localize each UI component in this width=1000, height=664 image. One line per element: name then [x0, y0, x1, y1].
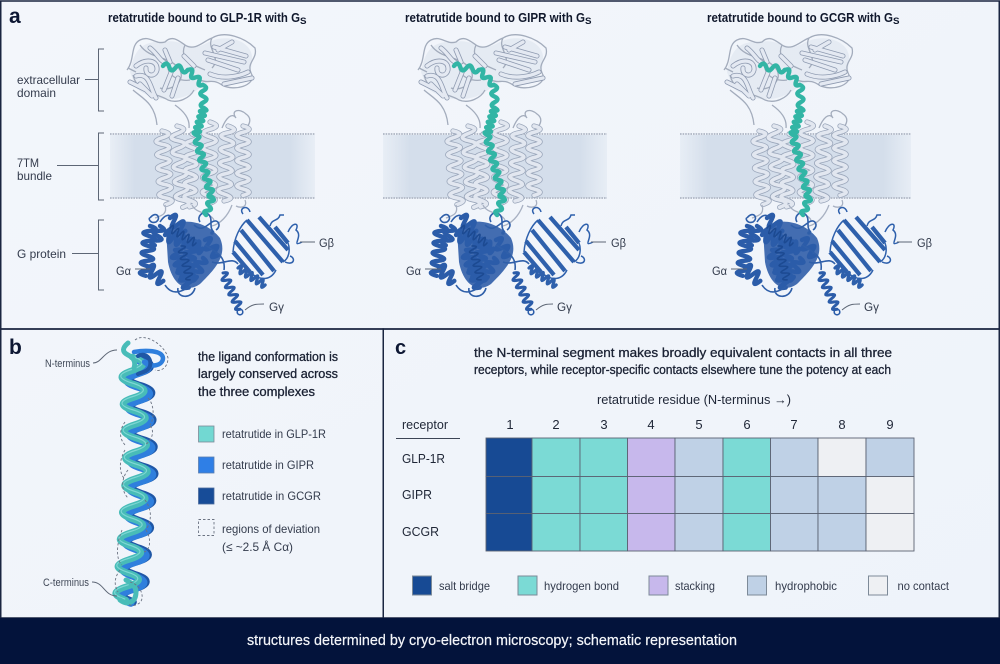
- C-terminus label: [43, 577, 117, 596]
- region label: 7TM bundle with bracket: bundle: [17, 169, 52, 183]
- subunit labels: GIPR complex: [406, 236, 626, 314]
- heading: GIPR complex: retatrutide bound to GIPR with G: [405, 10, 585, 25]
- region label: G protein with bracket: [17, 220, 104, 290]
- legend: ligand colours: [198, 426, 326, 554]
- subunit labels: GCGR complex: Gγ: [864, 300, 879, 314]
- legend: contact types: no contact: [898, 579, 950, 593]
- heading: GLP-1R complex: retatrutide bound to GLP-1R with G: [108, 10, 300, 25]
- N-terminus label: [45, 350, 117, 370]
- legend: ligand colours: regions of deviation: [222, 522, 320, 536]
- legend: contact types: hydrophobic: [775, 579, 837, 593]
- column numbers: 1: [506, 417, 514, 432]
- column numbers: 4: [647, 417, 655, 432]
- membrane 3: [680, 134, 911, 198]
- heading: GCGR complex: S: [893, 16, 900, 27]
- column numbers: 8: [838, 417, 846, 432]
- subunit labels: GCGR complex: [712, 236, 932, 314]
- subunit labels: GIPR complex: Gβ: [611, 236, 626, 250]
- panel: b, ligand overlay: [1, 329, 383, 618]
- heading: GIPR complex: S: [585, 16, 592, 27]
- structure: GIPR complex: [418, 35, 593, 315]
- regions of deviation outlines: [115, 338, 168, 606]
- statement text: the N-terminal segment makes broadly equivalent contacts in all three: [474, 345, 892, 360]
- legend: contact types: salt bridge: [439, 579, 490, 593]
- legend: ligand colours: (≤ ~2.5 Å Cα): [222, 539, 293, 554]
- subunit labels: GIPR complex: Gα: [406, 264, 421, 278]
- heading: GCGR complex: retatrutide bound to GCGR with G: [707, 10, 893, 25]
- column numbers: 9: [886, 417, 894, 432]
- structure: GLP-1R complex: [127, 35, 302, 315]
- structure: GCGR complex: [724, 35, 899, 315]
- footer banner: [0, 618, 1000, 664]
- N-terminus label: N-terminus: [45, 358, 90, 370]
- subunit labels: GLP-1R complex: Gβ: [319, 236, 334, 250]
- statement text: the ligand conformation is: [198, 349, 338, 364]
- subunit labels: GIPR complex: Gγ: [557, 300, 572, 314]
- row labels: GCGR: [402, 524, 439, 539]
- panel letter c: c: [395, 337, 406, 359]
- legend: contact types: stacking: [675, 579, 715, 593]
- subunit labels: GLP-1R complex: [116, 236, 334, 314]
- row labels: GLP-1R: [402, 451, 445, 466]
- statement text: [198, 349, 338, 399]
- subunit labels: GCGR complex: Gα: [712, 264, 727, 278]
- statement text: the three complexes: [198, 384, 315, 399]
- panel letter a: a: [9, 5, 21, 28]
- region label: G protein with bracket: G protein: [17, 247, 66, 261]
- legend: ligand colours: retatrutide in GIPR: [222, 458, 314, 472]
- column numbers: [506, 417, 894, 432]
- legend: contact types: [412, 576, 950, 595]
- region label: 7TM bundle with bracket: [17, 133, 104, 200]
- statement text: receptors, while receptor-specific contacts elsewhere tune the potency at each: [474, 362, 891, 377]
- column numbers: 5: [695, 417, 703, 432]
- column numbers: 6: [743, 417, 751, 432]
- statement text: largely conserved across: [198, 366, 338, 381]
- subunit labels: GCGR complex: Gβ: [917, 236, 932, 250]
- axis title: retatrutide residue (N-terminus →): [597, 393, 791, 407]
- region label: extracellular domain with bracket: domain: [17, 86, 56, 100]
- region label: extracellular domain with bracket: [17, 49, 104, 111]
- region label: extracellular domain with bracket: extracellular: [17, 73, 80, 87]
- row labels: [396, 418, 460, 539]
- overlaid ligand helices: [115, 343, 163, 603]
- row labels: receptor: [402, 418, 448, 432]
- heading: GLP-1R complex: S: [300, 16, 306, 27]
- panel: c, contact matrix: [383, 329, 999, 618]
- region label: 7TM bundle with bracket: 7TM: [17, 156, 39, 170]
- C-terminus label: C-terminus: [43, 577, 89, 589]
- membrane 2: [383, 134, 607, 198]
- legend: ligand colours: retatrutide in GLP-1R: [222, 427, 326, 441]
- column numbers: 3: [600, 417, 608, 432]
- panel letter b: b: [9, 336, 22, 359]
- heat map grid: [486, 438, 914, 551]
- legend: contact types: hydrogen bond: [544, 579, 619, 593]
- panel: a, three receptor complexes: [1, 1, 999, 329]
- row labels: GIPR: [402, 487, 432, 502]
- footer banner: structures determined by cryo-electron microscopy; schematic representation: [247, 632, 737, 649]
- subunit labels: GLP-1R complex: Gα: [116, 264, 131, 278]
- column numbers: 2: [552, 417, 560, 432]
- subunit labels: GLP-1R complex: Gγ: [269, 300, 284, 314]
- legend: ligand colours: retatrutide in GCGR: [222, 489, 321, 503]
- statement text: [474, 345, 892, 377]
- membrane 1: [110, 134, 315, 198]
- column numbers: 7: [790, 417, 798, 432]
